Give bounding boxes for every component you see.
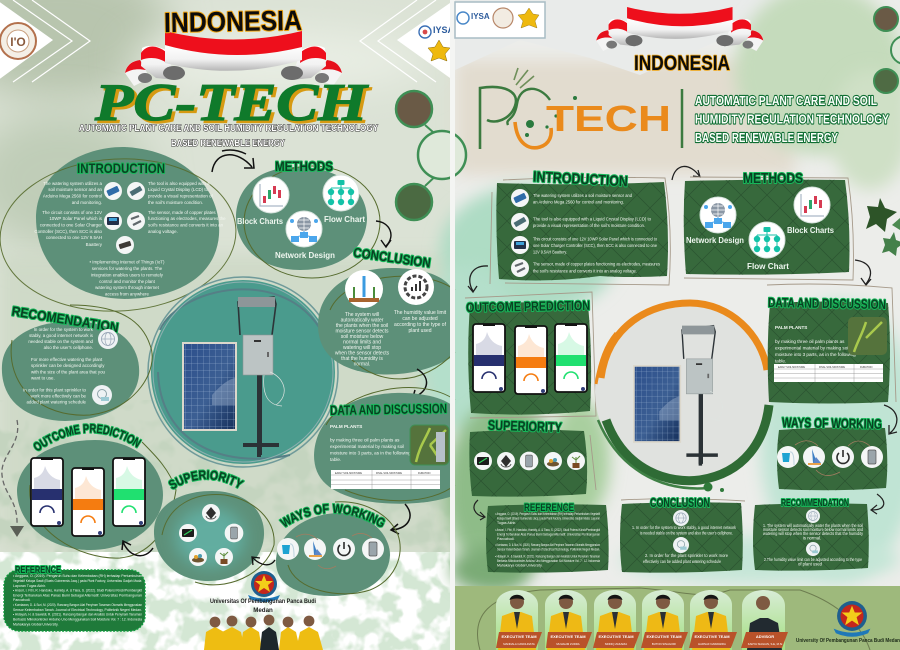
heading: INTRODUCTION <box>77 160 165 176</box>
intro text: The tool is also equipped with a <box>148 181 210 186</box>
arrow: conclusion to data <box>413 369 427 398</box>
logo: university right <box>834 601 870 637</box>
references text: • Anggara, O. (2019). Pengaruh Suhu dan Kelembaban (RH) terhadap Pertumbuhan <box>13 574 142 578</box>
references text: Kelapa Sawit (Elaeis Guineensis Jacq.) pada Plant Factory. Universitas Gadjah Mada: Laporan <box>497 516 600 520</box>
conclusion text: automatically water <box>341 318 384 324</box>
card: advisor: ADVISOR <box>756 634 774 639</box>
banner: flag ribbon <box>596 7 763 51</box>
table <box>331 470 440 489</box>
right header <box>455 2 900 256</box>
banner: flag ribbon <box>125 31 342 86</box>
card: advisor: KARYA SIAGIAN, S.E, M.Si <box>748 642 783 646</box>
photo: palm seedling <box>848 317 887 355</box>
phone: green <box>555 324 587 392</box>
recommendation text: watering will stop when the sensor detects that the humidity <box>763 531 864 536</box>
intro text: The watering system utilizes a <box>43 181 103 186</box>
logo box: IYSA <box>471 12 490 21</box>
data text: table. <box>775 358 786 364</box>
references text: Pancabudi. <box>497 537 515 541</box>
references text: Mahakarya Global University. <box>13 622 58 626</box>
heading <box>37 433 142 452</box>
conclusion text: can be adjusted <box>402 316 438 322</box>
icon: charge controller <box>104 212 122 230</box>
logo: gold star <box>428 40 450 61</box>
intro text: analog voltage. <box>148 229 178 234</box>
panel: right data and discussion <box>767 284 896 404</box>
icon: flow chart <box>323 175 359 211</box>
icon: schedule <box>673 537 689 553</box>
recommendation text: also the user's cellphone. <box>44 345 93 350</box>
labels: Network Design <box>275 250 335 260</box>
labels <box>686 225 834 271</box>
conclusion text: the plants when the soil <box>336 323 388 329</box>
icon: arduino <box>104 182 122 200</box>
references text: • Anggara, O. (2019). Pengaruh Suhu dan Kelembaban (RH) terhadap Pertumbuhan Vegetatif <box>495 512 600 516</box>
icon: battery <box>116 236 134 254</box>
references text: Pancabudi. <box>13 598 31 602</box>
heading: REFERENCE <box>15 564 61 576</box>
references text: Vegetatif Kelapa Sawit (Elaeis Guineensis Jacq.) pada Plant Factory, Universitas Gadjah Mada: <box>13 579 142 583</box>
references text: • Ansori, I. Fitri, R. Handoko, Hamidy, A. & Tiara, S. (2022). Studi Potensi Kincir/Pembangkit <box>495 528 600 532</box>
table: EARLY SOIL MOISTURE <box>778 366 805 369</box>
conclusion text: 1. In order for the system to work stably, a good internet network <box>632 525 737 530</box>
solar rig <box>182 297 284 457</box>
icon: gear chart <box>398 269 434 305</box>
central circle: left poster <box>148 277 338 467</box>
card: executive team 2: EXECUTIVE TEAM <box>550 634 586 639</box>
card: executive team 5 <box>689 590 737 650</box>
conclusion text: according to the type of <box>394 322 447 328</box>
left header <box>0 0 455 149</box>
university name left <box>210 598 316 614</box>
data text <box>330 424 411 462</box>
arrow: ways to recommendation <box>871 494 884 514</box>
data text: experimental material by making soil <box>330 444 404 449</box>
panel: right outcome prediction <box>465 292 596 418</box>
heading <box>284 513 382 528</box>
recommendation text: with the size of the plant area that you <box>31 370 106 374</box>
intro text: watering system through internet <box>95 285 160 290</box>
icon: schedule <box>92 385 112 405</box>
phone: orange <box>72 468 104 536</box>
icon: network <box>286 211 322 247</box>
data text: PALM PLANTS <box>775 325 807 330</box>
heading: CONCLUSION <box>352 245 432 271</box>
university name left: Medan <box>253 607 273 614</box>
introduction text: This circuit consists of one 12V 10WP Solar Panel which is connected to <box>533 236 658 242</box>
heading: RECOMENDATION <box>11 304 120 335</box>
card: executive team 2 <box>545 590 592 650</box>
green brush arc <box>606 405 769 481</box>
conclusion text: when the sensor detects <box>335 350 390 356</box>
introduction text: 12V 9.5AH Baattery. <box>533 250 567 254</box>
central circle: right poster <box>595 303 771 492</box>
title: INDONESIA: INDONESIA <box>634 52 730 75</box>
recommendation text <box>23 327 106 404</box>
table <box>774 364 883 382</box>
conclusion text: moisture sensor detects <box>335 328 389 334</box>
divider <box>681 89 683 148</box>
heading <box>172 479 243 491</box>
title: PC-TECH: PC-TECH <box>97 76 372 134</box>
arrow: methods to data <box>855 260 871 285</box>
labels: Flow Chart <box>747 261 789 271</box>
team photo left <box>204 615 323 650</box>
data text: moisture into 3 parts, as in the following <box>775 352 856 357</box>
intro text: connected to one Solar Charger <box>40 222 103 228</box>
labels: Block Charts <box>237 216 283 226</box>
table: FINAL SOIL MOISTURE <box>376 472 402 475</box>
panel: right introduction <box>490 169 670 285</box>
conclusion text: effectively can be added plant watering schedule <box>643 559 721 564</box>
arrow: ways to superiority <box>252 557 275 565</box>
recommendation text: added plant watering schedule <box>26 400 87 404</box>
card: executive team 4 <box>641 590 688 650</box>
heading: OUTCOME PREDICTION <box>466 298 590 315</box>
subtitle <box>79 123 379 149</box>
arrow: triangle marker <box>10 526 24 537</box>
recommendation text: of plant used <box>798 562 823 566</box>
icons: introduction <box>511 189 529 277</box>
icon: search <box>806 542 820 556</box>
recommendation text: stably, a good internet network is <box>29 333 94 338</box>
card: executive team 1: EXECUTIVE TEAM <box>501 634 537 639</box>
table: DURATION <box>418 472 431 475</box>
logo: university left <box>248 571 280 602</box>
data text: table. <box>330 457 341 462</box>
introduction text: provide a visual representation of the soil's moisture condition. <box>533 223 645 228</box>
panel: left introduction <box>0 147 240 317</box>
heading: METHODS <box>743 171 803 187</box>
card: executive team 5: HARNAF NAWAWIRA <box>698 642 726 646</box>
background: left poster <box>0 0 452 650</box>
conclusion text: 2. In order for the plant sprinkler to work more <box>645 553 728 558</box>
heading: REFERENCE <box>524 502 574 514</box>
data text: PALM PLANTS <box>330 424 362 429</box>
logo: PC TECH: TECH <box>546 98 671 139</box>
table: EARLY SOIL MOISTURE <box>335 472 362 475</box>
conclusion text: The system will <box>345 312 379 318</box>
conclusion text <box>632 525 737 564</box>
logo: institute seal <box>0 23 36 59</box>
solar rig <box>633 326 722 466</box>
intro text: soil moisture sensor and an <box>48 187 103 192</box>
arrow: methods to conclusion <box>376 221 391 247</box>
references text: • Kurniawan, D. & Suri, M. (2020). Rancang Bangun Alat Penyiram Tanaman Otomatis Menggunakan <box>495 543 600 547</box>
icon: block charts <box>253 177 289 213</box>
panel: left ways of working: WAYS OF WORKING <box>278 503 386 528</box>
subtitle: BASED RENEWABLE ENERGY <box>695 130 838 145</box>
title: PC-TECH: PC-TECH <box>94 74 369 132</box>
recommendation text: want to use. <box>31 376 55 380</box>
recommendation text: moisture sensor detects soil moisture below normal limits and <box>763 527 864 532</box>
introduction text: one Solar Charger Controller (SCC), then SCC is also connected to one <box>533 243 658 248</box>
card: executive team 2: MUHALIM ZUDRA <box>556 642 580 646</box>
icon: chart <box>806 509 820 523</box>
logo: PC TECH <box>480 68 671 149</box>
arrow: introduction to outcome <box>468 266 488 292</box>
intro text: Controller (SCC), then SCC is also <box>34 229 103 234</box>
logo: institute seal: I'O <box>10 35 26 49</box>
icon: block charts <box>794 187 830 223</box>
panel: left methods <box>236 158 380 278</box>
panel: left ways of working <box>276 501 401 596</box>
intro text: and monitoring. <box>72 200 102 205</box>
intro text: services for watering the plants. The <box>92 266 163 271</box>
references text: Laporan Tugas Akhir. <box>13 584 46 588</box>
intro text: functioning as electrodes, measures the <box>148 216 226 221</box>
intro text: provide a visual representation of <box>148 194 213 198</box>
orange brush arc <box>601 303 767 378</box>
icon: lcd <box>127 182 145 200</box>
photo: palm seedling <box>410 425 449 465</box>
intro text: 10WP Solar Panel which is <box>49 216 103 221</box>
panel: left conclusion <box>318 245 455 379</box>
intro text: access from anywhere <box>105 292 150 296</box>
intro text: the soil's moisture condition. <box>148 200 203 205</box>
references text: • Hidayah, H. & Sawaldi, R. (2021). Rancang Bangun dan Analisis Untuk Penyiram Tanaman <box>13 612 142 616</box>
labels: Block Charts <box>787 225 834 235</box>
recommendation text: In order for this plant sprinkler to <box>23 388 87 392</box>
introduction text <box>533 193 660 274</box>
card: executive team 3: SIDDIQ ZAKARIA <box>605 642 627 646</box>
heading: RECOMMENDATION <box>781 497 849 509</box>
introduction text: an Arduino Mega 2560 for control and monitoring. <box>533 200 624 204</box>
panel: left references <box>4 564 145 631</box>
conclusion text: The humidity value limit <box>394 310 447 316</box>
data text: moisture into 3 parts, as in the following <box>330 450 411 456</box>
panel: right ways of working <box>777 414 887 490</box>
introduction text: The sensor, made of copper plates functioning as electrodes, measures <box>533 262 660 266</box>
data text: by making three oil palm plants as <box>330 438 400 442</box>
arrow: data to ways <box>884 405 897 434</box>
recommendation text: In order for the system to work <box>34 327 94 332</box>
references text: Berbasis Mikrokontroler Arduino Uno Menggunakan Soil Moisture Vol. 7 : 12. Indonesia <box>497 559 600 563</box>
recommendation text: 1. The system will automatically water the plants when the soil <box>763 523 863 528</box>
recommendation text: work more effectively can be <box>30 394 87 398</box>
card: executive team 3 <box>593 590 640 650</box>
references text: • Ansori, I. Fitri, R. Handoko, Hamidy, A. & Tiara, S. (2022). Studi Potensi Kincir/Pembangkit <box>13 588 142 592</box>
arrow: data to ways <box>391 504 410 534</box>
conclusion text: watering will stop <box>343 345 381 351</box>
card: advisor <box>741 590 788 650</box>
references text: Energi Terbarukan Atas Panas Bumi Sebagai Alternatif. Universitas Pembangunan <box>497 532 600 536</box>
intro text: integration enables users to remotely <box>91 272 164 278</box>
arrow: superiority to references <box>474 500 485 520</box>
intro text: Liquid Crystal Display (LCD) to <box>148 187 209 192</box>
panel: right methods <box>684 171 853 280</box>
data text: by making three oil palm plants as <box>775 339 845 344</box>
heading: DATA AND DISCUSSION <box>330 401 447 418</box>
references text: Sensor Kelembaban Tanah. Journal of Electrical Technology, Politeknik Negeri Medan. <box>497 548 600 552</box>
phone: dark blue <box>473 324 505 392</box>
intro text: The circuit consists of one 12V <box>42 210 102 215</box>
icon: sensor <box>127 212 145 230</box>
panel: left data and discussion <box>314 388 455 504</box>
references text: Energi Terbarukan Atas Panas Bumi Sebagai Alternatif. Universitas Pembangunan <box>13 594 142 598</box>
panel: right superiority <box>469 417 596 497</box>
panel: left recommendation <box>2 304 152 421</box>
subtitle <box>695 93 889 145</box>
introduction text: The tool is also equipped with a Liquid Crystal Display (LCD) to <box>533 216 652 222</box>
references text: Berbasis Mikrokontroler Arduino Uno Menggunakan Soil Moisture Vol. 7 : 12. Indonesia <box>13 618 142 622</box>
intro text: connected to one 12V 9.5AH <box>46 235 102 240</box>
data text: experimental material by making soil <box>775 346 849 350</box>
conclusion text: normal limits and <box>343 340 381 346</box>
labels: Flow Chart <box>324 214 365 224</box>
recommendation text <box>763 523 864 566</box>
card: executive team 4: BUTON SINAGORI <box>652 642 676 646</box>
references text <box>13 574 142 626</box>
intro text: Baattery <box>86 242 103 247</box>
phone: dark blue <box>31 458 63 526</box>
heading: INTRODUCTION <box>533 169 628 190</box>
team cards <box>496 590 788 650</box>
title: INDONESIA: INDONESIA <box>164 5 302 38</box>
arrow: dashed path <box>2 420 18 525</box>
triangle and chevrons top-left <box>0 0 90 82</box>
table: DURATION <box>860 366 873 369</box>
conclusion text: soil moisture below <box>341 334 384 340</box>
triangle and chevrons top-right <box>360 0 451 82</box>
logo box <box>455 2 545 38</box>
introduction text: the soil's resistance and converts it into an analog voltage. <box>533 268 637 274</box>
heading: CONCLUSION <box>650 496 710 510</box>
references text: Sensor Kelembaban Tanah. Journal of Electrical Technology, Politeknik Negeri Medan. <box>13 608 142 612</box>
logo: IYSA: IYSA <box>433 25 455 35</box>
labels <box>237 214 365 260</box>
table: FINAL SOIL MOISTURE <box>819 366 845 369</box>
icons: ways of working <box>777 441 883 476</box>
background: right poster <box>420 0 900 650</box>
heading: METHODS <box>275 158 333 174</box>
intro text: Arduino Mega 2560 for control <box>43 194 102 198</box>
conclusion text: that the humidity is <box>341 356 383 362</box>
panel: right conclusion <box>620 496 745 573</box>
university name left: Universitas Of Pembangunan Panca Budi <box>210 598 316 605</box>
icon: stars <box>866 198 900 256</box>
recommendation text: 2.The humidity value limit can be adjusted according to the type <box>764 557 863 562</box>
labels: Network Design <box>686 235 744 245</box>
separator strip <box>450 0 455 650</box>
card: executive team 1 <box>496 590 542 650</box>
icon: network <box>700 197 736 233</box>
intro text: The sensor, made of copper plates <box>148 210 216 215</box>
panel: left superiority <box>154 469 275 586</box>
photo network: right side left poster <box>396 91 466 220</box>
intro text <box>34 181 226 296</box>
panel: left outcome prediction <box>17 423 176 559</box>
icon: globe <box>98 329 118 349</box>
recommendation text: sprinkler can be designed accordingly <box>31 363 105 368</box>
references text: Mahakarya Global University. <box>497 564 542 568</box>
recommendation text: For more effective watering the plant <box>31 357 103 362</box>
conclusion text <box>335 310 447 368</box>
arrow: introduction to methods <box>212 150 254 172</box>
recommendation text: is normal. <box>803 536 821 540</box>
references text <box>495 512 600 568</box>
recommendation text: needed stable on the system and <box>28 339 94 344</box>
heading: SUPERIORITY <box>488 417 563 435</box>
card: executive team 4: EXECUTIVE TEAM <box>646 634 682 639</box>
references text: • Kurniawan, D. & Suri, M. (2020). Rancang Bangun Alat Penyiram Tanaman Otomatis Menggunakan <box>13 603 142 607</box>
intro text: control and monitor the plant <box>99 279 156 284</box>
panel: right recommendation <box>753 497 869 571</box>
panel: left outcome prediction: OUTCOME PREDICTION <box>33 423 142 452</box>
photos: top right circles <box>874 7 900 93</box>
subtitle: BASED RENEWABLE ENERGY <box>171 138 286 149</box>
phone: green <box>113 458 145 526</box>
references text: Tugas Akhir. <box>497 521 516 525</box>
card: executive team 5: EXECUTIVE TEAM <box>694 634 730 639</box>
phone: orange <box>515 326 547 394</box>
icon: globe <box>673 510 689 526</box>
data text <box>775 325 856 364</box>
icon: irrigation <box>345 270 383 308</box>
card: executive team 3: EXECUTIVE TEAM <box>598 634 634 639</box>
conclusion text: normal. <box>354 362 370 368</box>
intro text: soil's resistance and converts it into an <box>148 222 224 228</box>
panel: right references <box>486 502 609 573</box>
icons: superiority <box>179 504 243 566</box>
introduction text: The watering system utilizes a soil moisture sensor and <box>533 193 633 198</box>
references text: • Hidayah, H. & Sawaldi, R. (2021). Rancang Bangun dan Analisis Untuk Penyiram Tanaman <box>495 554 600 558</box>
subtitle: AUTOMATIC PLANT CARE AND SOIL HUMIDITY REGULATION TECHNOLOGY <box>79 123 379 134</box>
panel: left superiority: SUPERIORITY <box>168 469 245 490</box>
intro text: • Implementing Internet of Things (IoT) <box>90 260 165 264</box>
conclusion text: plant used <box>408 328 432 334</box>
logo: IYSA <box>419 25 455 38</box>
arrow: ways to outcome <box>122 541 153 556</box>
icon: flow chart <box>749 222 785 258</box>
conclusion text: is needed stable on the system and also the user's cellphone. <box>640 530 733 536</box>
icons: ways of working <box>277 533 384 569</box>
icons: superiority <box>474 452 585 470</box>
arrow: right introduction to methods <box>672 166 700 180</box>
card: executive team 1: MANDALA CANDLINATA <box>503 642 535 646</box>
